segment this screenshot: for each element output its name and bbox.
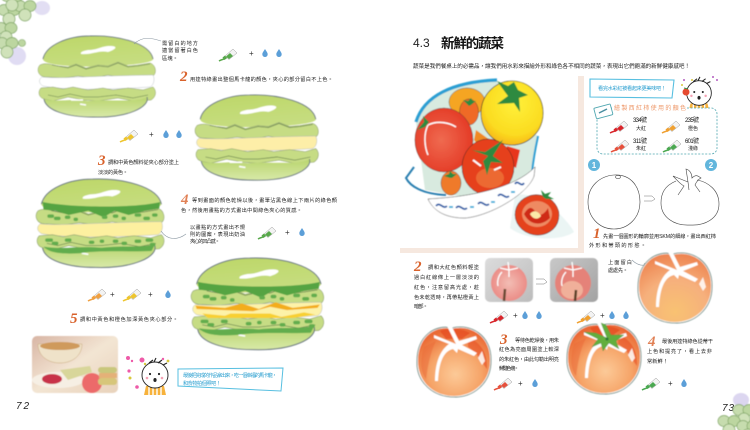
caption: reserved highlights: 需留白的地方 bbox=[162, 39, 198, 47]
step 3 text bbox=[499, 332, 560, 372]
arrow between photos bbox=[536, 279, 547, 284]
step 4 text: 最後用達特綠色從蒂干 bbox=[662, 337, 713, 345]
photo: tea and macarons bbox=[32, 336, 118, 393]
step 2 text: 2 bbox=[179, 69, 188, 85]
callout: watercolor tomato invitation bbox=[590, 79, 674, 98]
macaron step 2: yellow filling bbox=[195, 95, 318, 180]
step 2 text: 過白紅線條上一層淡淡的 bbox=[414, 273, 479, 281]
step 2 text: 用達特綠畫出整個馬卡龍的顏色，夾心的部分留白不上色。 bbox=[190, 75, 333, 83]
step 1 text: 1 bbox=[593, 226, 600, 242]
character with colored dots bbox=[126, 356, 169, 395]
caption: dotted texture: 則的圖案，表現出奶油 bbox=[190, 230, 245, 238]
step 4 text bbox=[647, 334, 713, 365]
palette panel: tomato colors: 601號 bbox=[685, 137, 699, 145]
macaron step 1: plain green bbox=[38, 36, 155, 117]
badge 1 bbox=[588, 159, 600, 171]
paint mix: orange tube with two water drops bbox=[577, 311, 629, 323]
callout: watercolor tomato invitation: 看完水彩紅被看起來更美味吧！ bbox=[598, 84, 666, 92]
badge 2 bbox=[705, 159, 717, 171]
intro paragraph: 蔬菜是我們餐桌上的必需品，讓我們用水彩來描繪外形和綠色各不相同的蔬菜，表現出它們飽滿的新鮮健康感吧！ bbox=[413, 62, 690, 70]
sketch 2: tomato outline with calyx bbox=[661, 169, 719, 225]
step 4 text: 4 bbox=[647, 334, 656, 350]
sketch 1: circle outline bbox=[588, 175, 640, 229]
palette panel: tomato colors bbox=[594, 102, 717, 154]
step 3 text: 的朱紅色，由此勾勒出明亮 bbox=[499, 355, 559, 363]
palette panel: tomato colors: 334號 bbox=[633, 116, 647, 124]
palette panel: tomato colors: 淺綠 bbox=[688, 145, 698, 152]
paint mix: orange and yellow tubes with water drop bbox=[88, 289, 171, 301]
caption: dotted texture: 夾心的凹凸感。 bbox=[190, 237, 220, 245]
step 3 text: 3 bbox=[499, 332, 508, 348]
step 4 text: 常新鮮！ bbox=[647, 357, 668, 365]
paint mix: green tube with one water drop: + bbox=[285, 228, 290, 237]
step 3 text: 紅色為亮面周圍塗上較深 bbox=[499, 345, 559, 353]
section title bbox=[413, 32, 504, 52]
paint mix: vermilion tube with water drop: + bbox=[518, 379, 523, 388]
step 2 text: 暗部。 bbox=[414, 302, 428, 310]
arrow between sketches bbox=[644, 196, 655, 201]
step 4 text: 等到畫面的顏色乾燥以後，畫筆沾黑色線上下兩片的綠色顏 bbox=[192, 196, 338, 204]
step 2 text bbox=[413, 259, 480, 310]
badge 1: 1 bbox=[592, 161, 597, 170]
macaron step 3: darker green details bbox=[36, 179, 164, 267]
caption: top reserved white: 上面留白 bbox=[608, 258, 632, 266]
paint mix: red tube with two water drops: + bbox=[513, 311, 518, 320]
character holding tomato bbox=[681, 76, 718, 112]
step 3 text: 3 bbox=[97, 153, 106, 169]
page number 72: 72 bbox=[16, 401, 29, 412]
step 4 text: 色，然後用畫點的方式畫出中間綠色夾心的質感。 bbox=[181, 206, 302, 214]
paint mix: yellow tube with two water drops bbox=[120, 130, 182, 142]
step 1 text: 外形和蒂頭的形態。 bbox=[589, 241, 646, 249]
caption: dotted texture bbox=[161, 223, 246, 245]
palette panel: tomato colors: 橙色 bbox=[688, 125, 698, 132]
step 3 text: 等待色乾燥後，用朱 bbox=[515, 336, 560, 344]
step 5 text bbox=[70, 311, 178, 327]
page number 73: 73 bbox=[722, 403, 734, 414]
caption: reserved highlights bbox=[134, 38, 198, 62]
paint mix: vermilion tube with water drop bbox=[494, 378, 538, 390]
paint mix: green tube with one water drop bbox=[258, 227, 305, 239]
palette panel: tomato colors: 朱紅 bbox=[636, 145, 646, 152]
step 5 text: 5 bbox=[70, 311, 78, 327]
paint mix: orange and yellow tubes with water drop: + bbox=[110, 290, 115, 299]
caption: reserved highlights: 區塊。 bbox=[162, 54, 178, 62]
caption: dotted texture: 以畫點的方式畫出不規 bbox=[190, 223, 246, 231]
card icon: paint tube bbox=[594, 104, 613, 119]
paint mix: green tube with water drop: + bbox=[668, 379, 673, 388]
step 1 text: 先畫一個圓形的輪廓並用SKM的細線，畫出西紅柿 bbox=[603, 232, 716, 240]
section title: 新鮮的蔬菜 bbox=[441, 32, 504, 52]
caption: top reserved white: 處處先。 bbox=[608, 266, 628, 274]
paint mix: yellow tube with two water drops: + bbox=[149, 130, 154, 139]
palette panel: tomato colors: 311號 bbox=[633, 137, 647, 145]
illustration: bowl of tomatoes bbox=[406, 80, 574, 239]
paint mix: green tube with water drop bbox=[642, 378, 687, 390]
step 4 text: 上色和提亮了，看上去非 bbox=[647, 347, 712, 355]
callout: blue handwritten frame: 最後把完成的作品拿出來，吃一個幸福的馬卡龍， bbox=[183, 371, 277, 379]
photo: wet wash, second stage bbox=[550, 258, 598, 302]
caption: top reserved white bbox=[608, 258, 648, 274]
paint mix: orange tube with two water drops: + bbox=[600, 311, 605, 320]
palette panel: tomato colors: 大紅 bbox=[636, 125, 646, 132]
callout: blue handwritten frame: 和食物拍個照吧！ bbox=[183, 379, 221, 387]
step 3 text: 鮮豔色塊。 bbox=[499, 364, 519, 372]
photo: wet wash, first stage bbox=[485, 258, 533, 302]
step 5 text: 調和中黃色和橙色加深黃色夾心部分。 bbox=[80, 315, 178, 323]
step 1 text bbox=[589, 226, 716, 249]
paint mix: green tube with two water drops bbox=[219, 49, 282, 61]
callout: blue handwritten frame bbox=[178, 368, 283, 391]
macaron step 4: finished bbox=[191, 258, 324, 350]
step 4 text: 4 bbox=[180, 192, 189, 208]
palette panel: tomato colors: 繪製西紅柿使用的顏色 bbox=[614, 104, 686, 112]
badge 2: 2 bbox=[709, 161, 714, 170]
step 2 text: 調和大紅色顏料輕塗 bbox=[428, 263, 479, 271]
step 2 text: 色未乾透時，再帶點橙黃上 bbox=[414, 293, 479, 301]
step 2 text: 紅色，注意留高光處，趁 bbox=[414, 283, 480, 291]
paint mix: red tube with two water drops bbox=[490, 311, 542, 323]
panel shadow strips bbox=[400, 76, 584, 253]
paint mix: green tube with two water drops: + bbox=[249, 49, 254, 58]
step 3 text: 淡淡的黃色。 bbox=[98, 168, 128, 176]
tomato stage: finished with green calyx bbox=[567, 323, 641, 394]
caption: reserved highlights: 適當留著白色 bbox=[162, 46, 198, 54]
tomato stage: orange wash bbox=[638, 252, 712, 323]
step 2 text: 2 bbox=[413, 259, 422, 275]
step 3 text: 調和中黃色顏料從夾心部分塗上 bbox=[108, 158, 179, 166]
decoration: top-left clover and flowers bbox=[0, 0, 50, 65]
tomato stage: deepened red bbox=[417, 326, 491, 397]
step 4 text bbox=[180, 192, 338, 214]
section title: 4.3 bbox=[413, 36, 430, 50]
step 3 text bbox=[97, 153, 179, 176]
palette panel: tomato colors: 235號 bbox=[685, 116, 699, 124]
step 2 text bbox=[179, 69, 333, 85]
decoration: bottom-right clover and flowers bbox=[718, 393, 750, 430]
paint mix: orange and yellow tubes with water drop: + bbox=[148, 290, 153, 299]
